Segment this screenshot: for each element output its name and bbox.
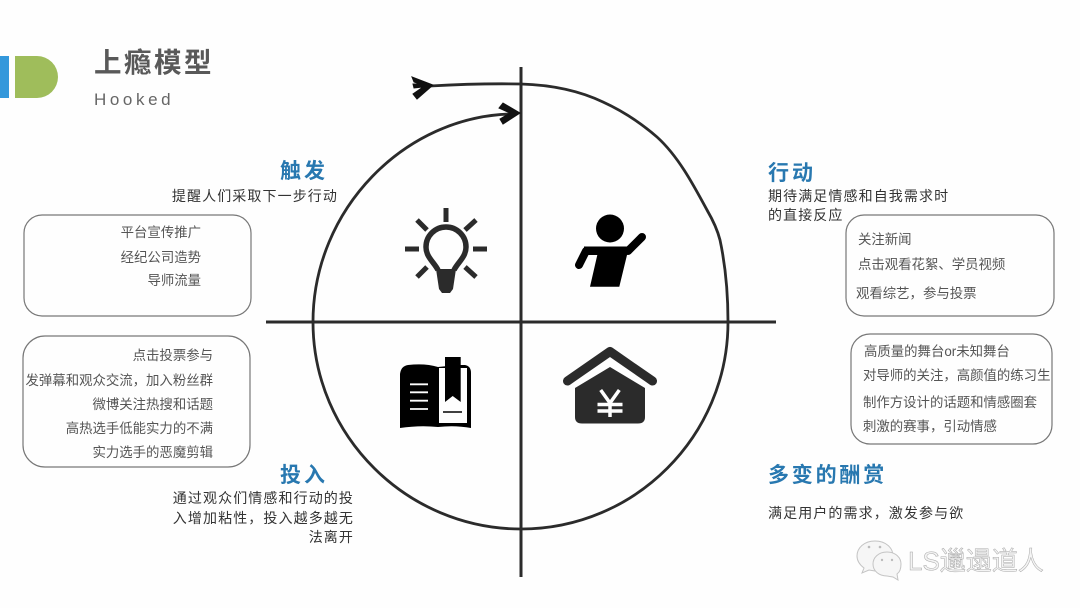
panel: trigger examples: 经纪公司造势 [121, 250, 201, 265]
logo mark [0, 56, 58, 98]
investment description [173, 490, 354, 545]
panel: reward examples: 高质量的舞台or未知舞台 [864, 343, 1010, 359]
section: investment heading: 投入 [280, 464, 328, 487]
panel: investment examples: 实力选手的恶魔剪辑 [92, 445, 213, 460]
title: 上瘾模型 [94, 47, 214, 78]
panel: reward examples: 制作方设计的话题和情感圈套 [863, 394, 1037, 410]
icon: person raising arm [579, 214, 642, 287]
panel: reward examples [851, 334, 1052, 444]
panel: investment examples: 高热选手低能实力的不满 [66, 420, 213, 436]
watermark: LS邋遢道人 [908, 546, 1044, 576]
subtitle: Hooked [94, 90, 174, 109]
trigger description: 提醒人们采取下一步行动 [172, 188, 338, 204]
cycle diagram: axes and loop [266, 67, 776, 577]
panel: investment examples: 发弹幕和观众交流，加入粉丝群 [26, 372, 213, 388]
panel: trigger examples: 导师流量 [147, 273, 201, 288]
icon: house with yen sign [568, 352, 652, 424]
variable reward description: 满足用户的需求，激发参与欲 [768, 505, 964, 521]
panel: investment examples: 点击投票参与 [133, 347, 213, 363]
panel: reward examples: 对导师的关注，高颜值的练习生 [863, 367, 1050, 383]
section: trigger heading: 触发 [280, 160, 328, 183]
panel: action examples: 点击观看花絮、学员视频 [858, 256, 1005, 272]
investment description: 入增加粘性，投入越多越无 [173, 510, 354, 526]
panel: action examples: 关注新闻 [858, 232, 912, 247]
icon: light bulb [405, 208, 487, 293]
panel: trigger examples [24, 215, 251, 316]
panel: reward examples: 刺激的赛事，引动情感 [863, 418, 997, 434]
section: action heading: 行动 [768, 162, 816, 185]
section: variable reward heading: 多变的酬赏 [768, 463, 887, 487]
panel: investment examples: 微博关注热搜和话题 [92, 397, 213, 412]
panel: trigger examples: 平台宣传推广 [121, 225, 201, 240]
icon: open book with bookmark [400, 357, 471, 428]
investment description: 法离开 [309, 529, 354, 545]
panel: action examples [846, 215, 1054, 316]
action description: 的直接反应 [768, 207, 844, 223]
panel: investment examples [23, 336, 250, 467]
watermark [857, 541, 1044, 580]
panel: action examples: 观看综艺，参与投票 [856, 285, 977, 301]
action description [768, 188, 949, 223]
investment description: 通过观众们情感和行动的投 [173, 490, 354, 506]
action description: 期待满足情感和自我需求时 [768, 188, 949, 204]
